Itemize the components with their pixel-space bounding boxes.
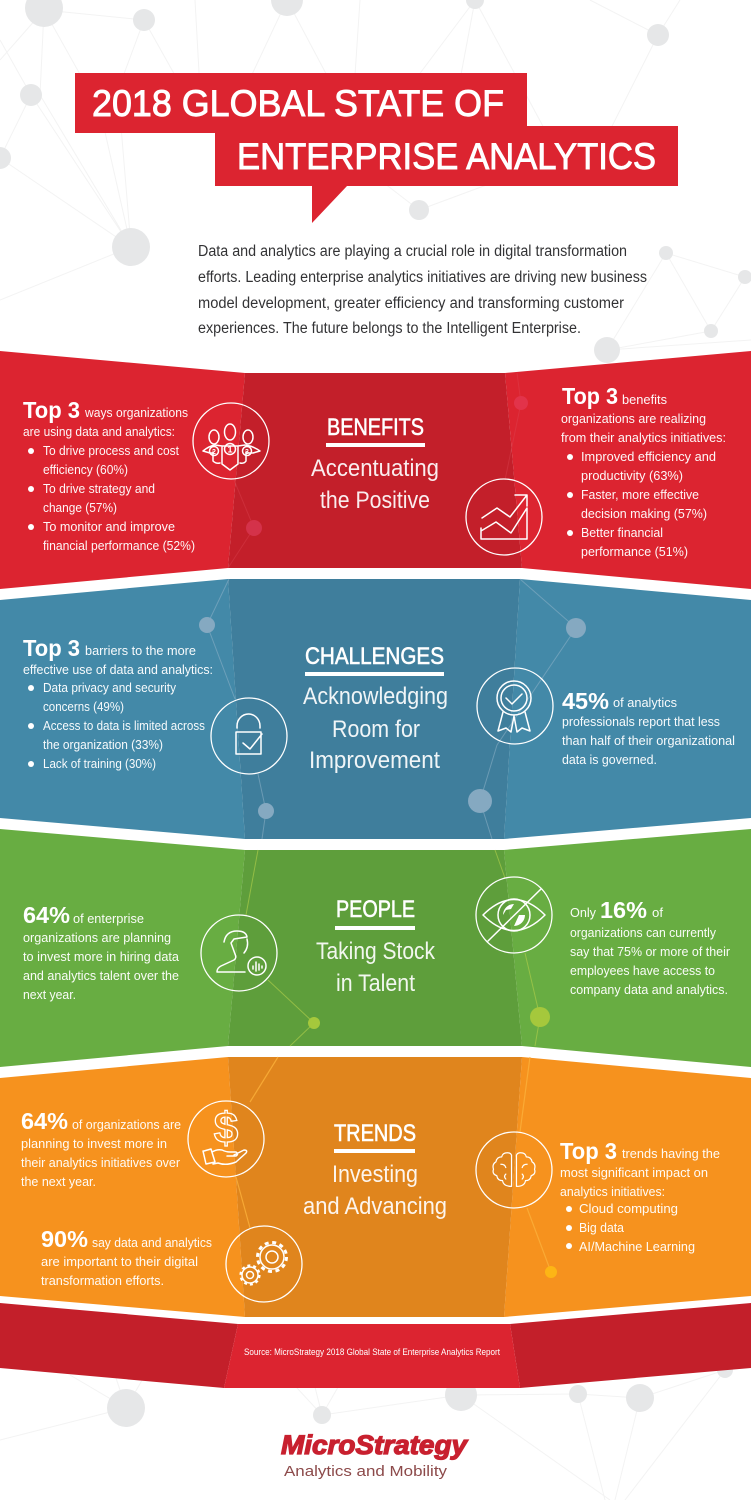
icon: gears xyxy=(226,1226,302,1302)
icon: award ribbon xyxy=(477,668,553,744)
benefits left text: To monitor and improve xyxy=(43,519,175,534)
trends left text xyxy=(21,1108,181,1189)
people left text: and analytics talent over the xyxy=(23,968,179,983)
benefits right text: decision making (57%) xyxy=(581,506,707,521)
benefits left text: To drive process and cost xyxy=(43,443,179,458)
challenges heading: CHALLENGES xyxy=(305,643,444,670)
challenges right text: professionals report that less xyxy=(562,714,720,729)
people right text: 16% xyxy=(600,897,647,923)
benefits right text xyxy=(561,383,726,559)
benefits left text xyxy=(23,397,195,553)
panel: challenges xyxy=(0,579,751,839)
benefits left text: Top 3 xyxy=(23,397,80,423)
people heading xyxy=(316,896,436,997)
benefits right text: performance (51%) xyxy=(581,544,688,559)
benefits left text: are using data and analytics: xyxy=(23,424,175,439)
icon: hand with dollar xyxy=(188,1101,264,1177)
people heading: Taking Stock xyxy=(316,938,436,965)
intro paragraph: model development, greater efficiency and transforming customer xyxy=(198,295,624,312)
title speech bubble xyxy=(75,73,678,223)
challenges left text: Lack of training (30%) xyxy=(43,756,156,771)
challenges left text xyxy=(23,635,213,771)
trends right text: most significant impact on xyxy=(560,1165,708,1180)
people right text: company data and analytics. xyxy=(570,982,728,997)
trends right text: analytics initiatives: xyxy=(560,1184,665,1199)
people right text: of xyxy=(652,905,663,920)
title speech bubble: ENTERPRISE ANALYTICS xyxy=(237,136,656,177)
people heading: in Talent xyxy=(336,970,415,997)
logo: MicroStrategy: MicroStrategy xyxy=(281,1430,469,1460)
benefits left text: To drive strategy and xyxy=(43,481,155,496)
logo: MicroStrategy xyxy=(281,1430,469,1480)
challenges right text xyxy=(562,688,735,767)
challenges right text: data is governed. xyxy=(562,752,657,767)
benefits left text: ways organizations xyxy=(84,405,188,420)
benefits right text: Improved efficiency and xyxy=(581,449,716,464)
challenges left text: concerns (49%) xyxy=(43,699,124,714)
people right text: organizations can currently xyxy=(570,925,716,940)
people left text: 64% xyxy=(23,902,70,928)
text: 90% statistic xyxy=(41,1226,212,1288)
trends left text: the next year. xyxy=(21,1174,96,1189)
text: 90% statistic: 90% xyxy=(41,1226,88,1252)
challenges right text: than half of their organizational xyxy=(562,733,735,748)
challenges right text: of analytics xyxy=(613,695,677,710)
benefits heading xyxy=(311,414,439,514)
trends right text: Cloud computing xyxy=(579,1201,678,1216)
people right text xyxy=(570,897,731,997)
challenges right text: 45% xyxy=(562,688,609,714)
benefits right text: benefits xyxy=(622,392,667,407)
panel: benefits xyxy=(0,351,751,589)
challenges heading: Room for xyxy=(332,716,420,743)
trends left text: of organizations are xyxy=(72,1117,181,1132)
panel: people xyxy=(0,829,751,1067)
panel: source footer band xyxy=(0,1303,751,1388)
benefits left text: change (57%) xyxy=(43,500,117,515)
benefits heading: the Positive xyxy=(320,487,430,514)
people left text: organizations are planning xyxy=(23,930,171,945)
benefits left text: efficiency (60%) xyxy=(43,462,128,477)
trends right text: Top 3 xyxy=(560,1138,617,1164)
intro paragraph: efforts. Leading enterprise analytics initiatives are driving new business xyxy=(198,269,647,286)
challenges heading: Improvement xyxy=(309,747,440,774)
people left text: to invest more in hiring data xyxy=(23,949,180,964)
text: 90% statistic: say data and analytics xyxy=(92,1235,212,1250)
people right text: Only xyxy=(570,905,596,920)
benefits heading: BENEFITS xyxy=(327,414,424,441)
icon: brain xyxy=(476,1132,552,1208)
icon: person with chart xyxy=(201,915,277,991)
icon: ranked people: 2 xyxy=(212,449,216,456)
trends right text: trends having the xyxy=(622,1146,720,1161)
benefits right text: from their analytics initiatives: xyxy=(561,430,726,445)
icon: ranked people: 3 xyxy=(245,449,249,456)
icon: crossed-out eye xyxy=(476,877,552,953)
challenges left text: Data privacy and security xyxy=(43,680,176,695)
source note: Source: MicroStrategy 2018 Global State of Enterprise Analytics Report xyxy=(244,1347,500,1358)
trends heading: Investing xyxy=(332,1161,418,1188)
benefits left text: financial performance (52%) xyxy=(43,538,195,553)
trends left text: 64% xyxy=(21,1108,68,1134)
logo: MicroStrategy: Analytics and Mobility xyxy=(284,1464,448,1480)
benefits heading: Accentuating xyxy=(311,455,439,482)
intro paragraph xyxy=(198,243,647,337)
trends left text: planning to invest more in xyxy=(21,1136,167,1151)
benefits right text: organizations are realizing xyxy=(561,411,706,426)
trends heading: and Advancing xyxy=(303,1193,447,1220)
challenges heading: Acknowledging xyxy=(303,683,448,710)
text: 90% statistic: are important to their digital xyxy=(41,1254,198,1269)
trends right text: Big data xyxy=(579,1220,625,1235)
intro paragraph: experiences. The future belongs to the Intelligent Enterprise. xyxy=(198,320,581,337)
people heading: PEOPLE xyxy=(336,896,415,923)
intro paragraph: Data and analytics are playing a crucial role in digital transformation xyxy=(198,243,627,260)
icon: ranked people xyxy=(193,403,269,479)
trends heading: TRENDS xyxy=(334,1120,416,1147)
benefits right text: Faster, more effective xyxy=(581,487,699,502)
challenges left text: Access to data is limited across xyxy=(43,718,205,733)
benefits right text: Top 3 xyxy=(562,383,618,409)
icon: padlock with check xyxy=(211,698,287,774)
icon: hand with dollar: $ xyxy=(214,1104,238,1153)
challenges left text: effective use of data and analytics: xyxy=(23,662,213,677)
icon: ranked people: 1 xyxy=(227,444,233,454)
people right text: say that 75% or more of their xyxy=(570,944,731,959)
challenges heading xyxy=(303,643,448,774)
panel: trends xyxy=(0,1057,751,1317)
benefits right text: productivity (63%) xyxy=(581,468,683,483)
people right text: employees have access to xyxy=(570,963,715,978)
people left text: of enterprise xyxy=(73,911,144,926)
challenges left text: the organization (33%) xyxy=(43,737,163,752)
trends right text xyxy=(560,1138,720,1254)
text: 90% statistic: transformation efforts. xyxy=(41,1273,164,1288)
people left text: next year. xyxy=(23,987,76,1002)
title speech bubble: 2018 GLOBAL STATE OF xyxy=(92,83,504,124)
challenges left text: barriers to the more xyxy=(85,643,196,658)
trends left text: their analytics initiatives over xyxy=(21,1155,181,1170)
challenges left text: Top 3 xyxy=(23,635,80,661)
icon: rising chart xyxy=(466,479,542,555)
people left text xyxy=(23,902,180,1002)
benefits right text: Better financial xyxy=(581,525,663,540)
trends right text: AI/Machine Learning xyxy=(579,1239,695,1254)
trends heading xyxy=(303,1120,447,1220)
